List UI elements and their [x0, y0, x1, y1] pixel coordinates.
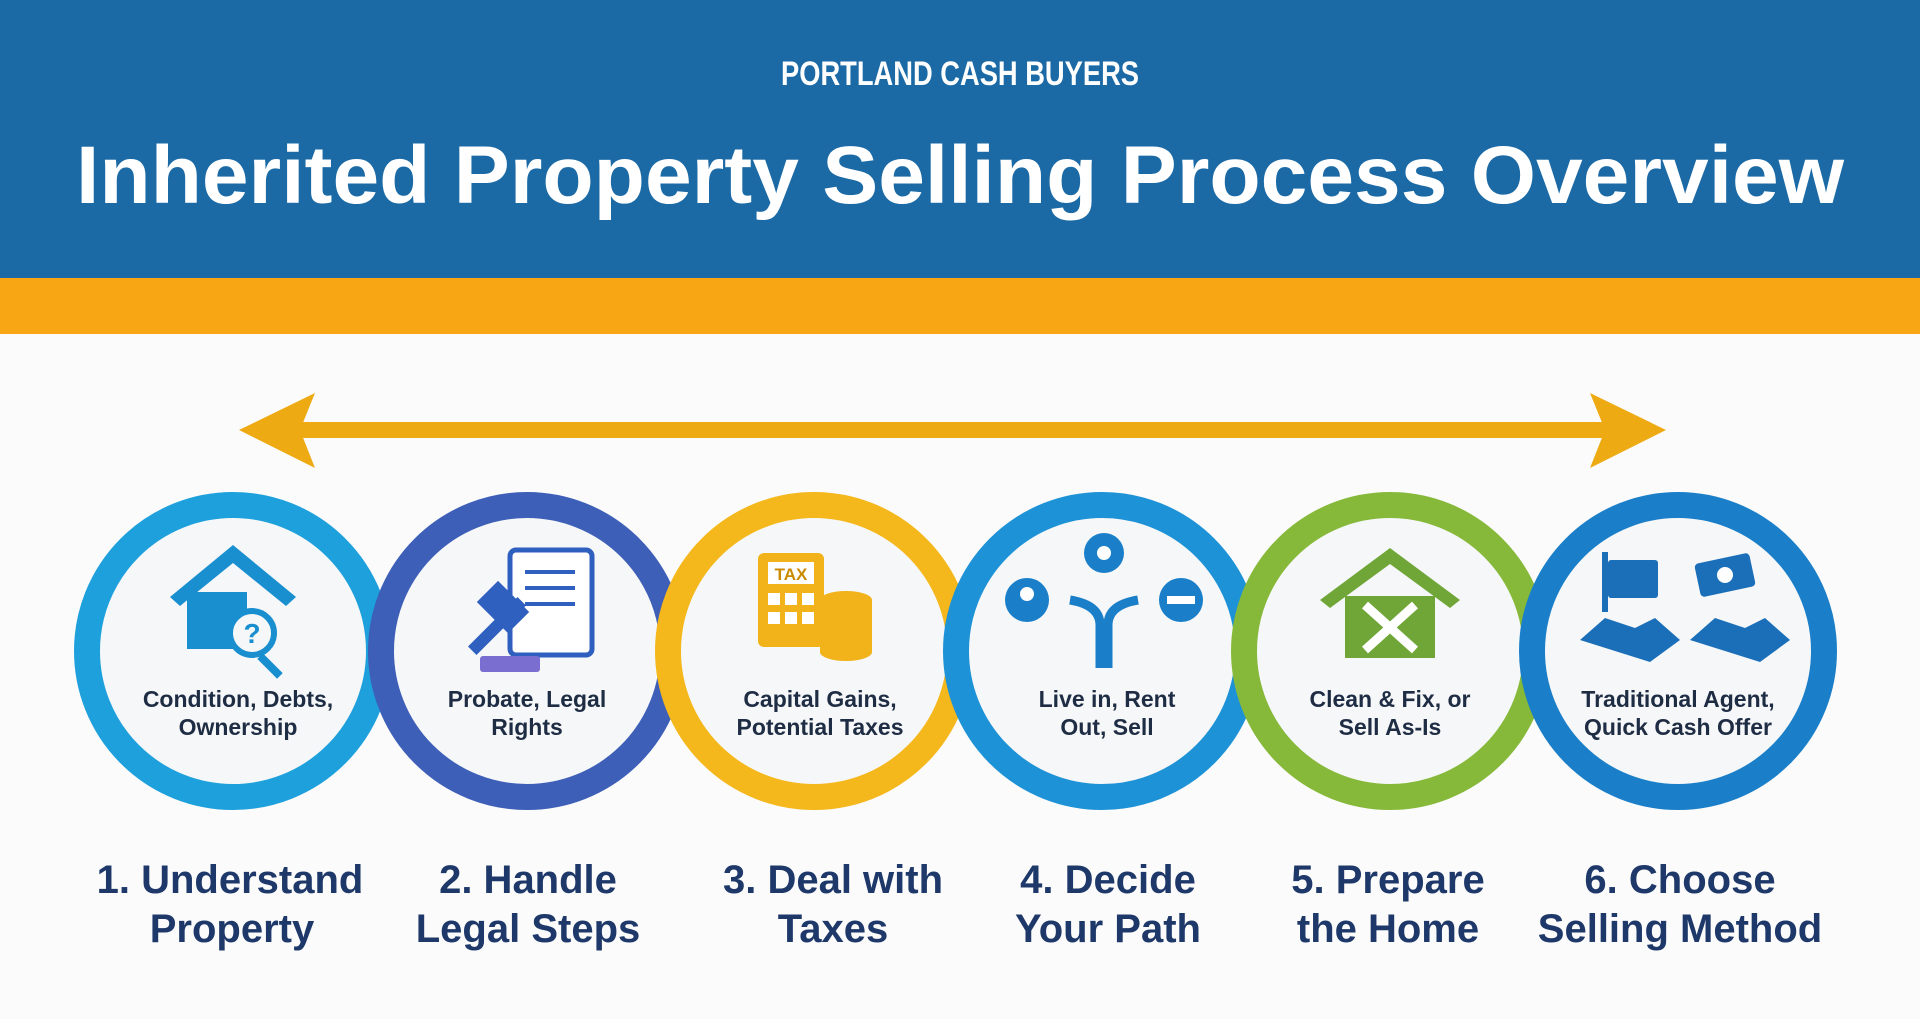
- step labels: 3. Deal with: [723, 858, 943, 902]
- header band: [0, 0, 1920, 278]
- step 3 circle: [668, 505, 960, 797]
- step 5 circle: [1244, 505, 1536, 797]
- step labels: Your Path: [1015, 907, 1201, 951]
- step 2 circle: [381, 505, 673, 797]
- step labels: the Home: [1297, 907, 1479, 951]
- brand name: PORTLAND CASH BUYERS: [781, 55, 1139, 93]
- step labels: 5. Prepare: [1291, 858, 1485, 902]
- title: Inherited Property Selling Process Overview: [76, 130, 1844, 221]
- orange band: [0, 278, 1920, 334]
- step 3 circle: Potential Taxes: [736, 714, 904, 740]
- arrow: double-headed: [239, 393, 1666, 468]
- step 1 circle: Ownership: [179, 714, 297, 740]
- step 6 circle: Traditional Agent,: [1581, 686, 1775, 712]
- step labels: Taxes: [778, 907, 888, 951]
- step 5 circle: Sell As-Is: [1339, 714, 1441, 740]
- step 1 circle: Condition, Debts,: [143, 686, 333, 712]
- step labels: [97, 858, 1822, 951]
- icon: house with tools: [1320, 548, 1460, 658]
- step labels: Legal Steps: [416, 907, 640, 951]
- step 1 circle: [87, 505, 379, 797]
- step 6 circle: Quick Cash Offer: [1584, 714, 1772, 740]
- step 6 circle: [1532, 505, 1824, 797]
- step labels: 4. Decide: [1020, 858, 1196, 902]
- icon: house with magnifier: ?: [243, 618, 261, 649]
- step 3 circle: Capital Gains,: [743, 686, 897, 712]
- icon: gavel and scroll: [468, 550, 592, 672]
- step labels: Property: [150, 907, 315, 951]
- step 4 circle: Live in, Rent: [1039, 686, 1176, 712]
- icon: house with magnifier: [170, 545, 296, 679]
- step 4 circle: Out, Sell: [1060, 714, 1154, 740]
- icon: tax calculator and coins: [758, 553, 872, 661]
- step 5 circle: Clean & Fix, or: [1309, 686, 1471, 712]
- step labels: Selling Method: [1538, 907, 1822, 951]
- step 2 circle: Rights: [491, 714, 563, 740]
- icon: decision paths: [1005, 533, 1203, 668]
- icon: sign, cash, handshakes: [1580, 552, 1790, 662]
- step 4 circle: [956, 505, 1248, 797]
- step labels: 6. Choose: [1584, 858, 1776, 902]
- step 2 circle: Probate, Legal: [448, 686, 606, 712]
- step labels: 1. Understand: [97, 858, 363, 902]
- step labels: 2. Handle: [439, 858, 617, 902]
- icon: tax calculator and coins: TAX: [775, 565, 808, 584]
